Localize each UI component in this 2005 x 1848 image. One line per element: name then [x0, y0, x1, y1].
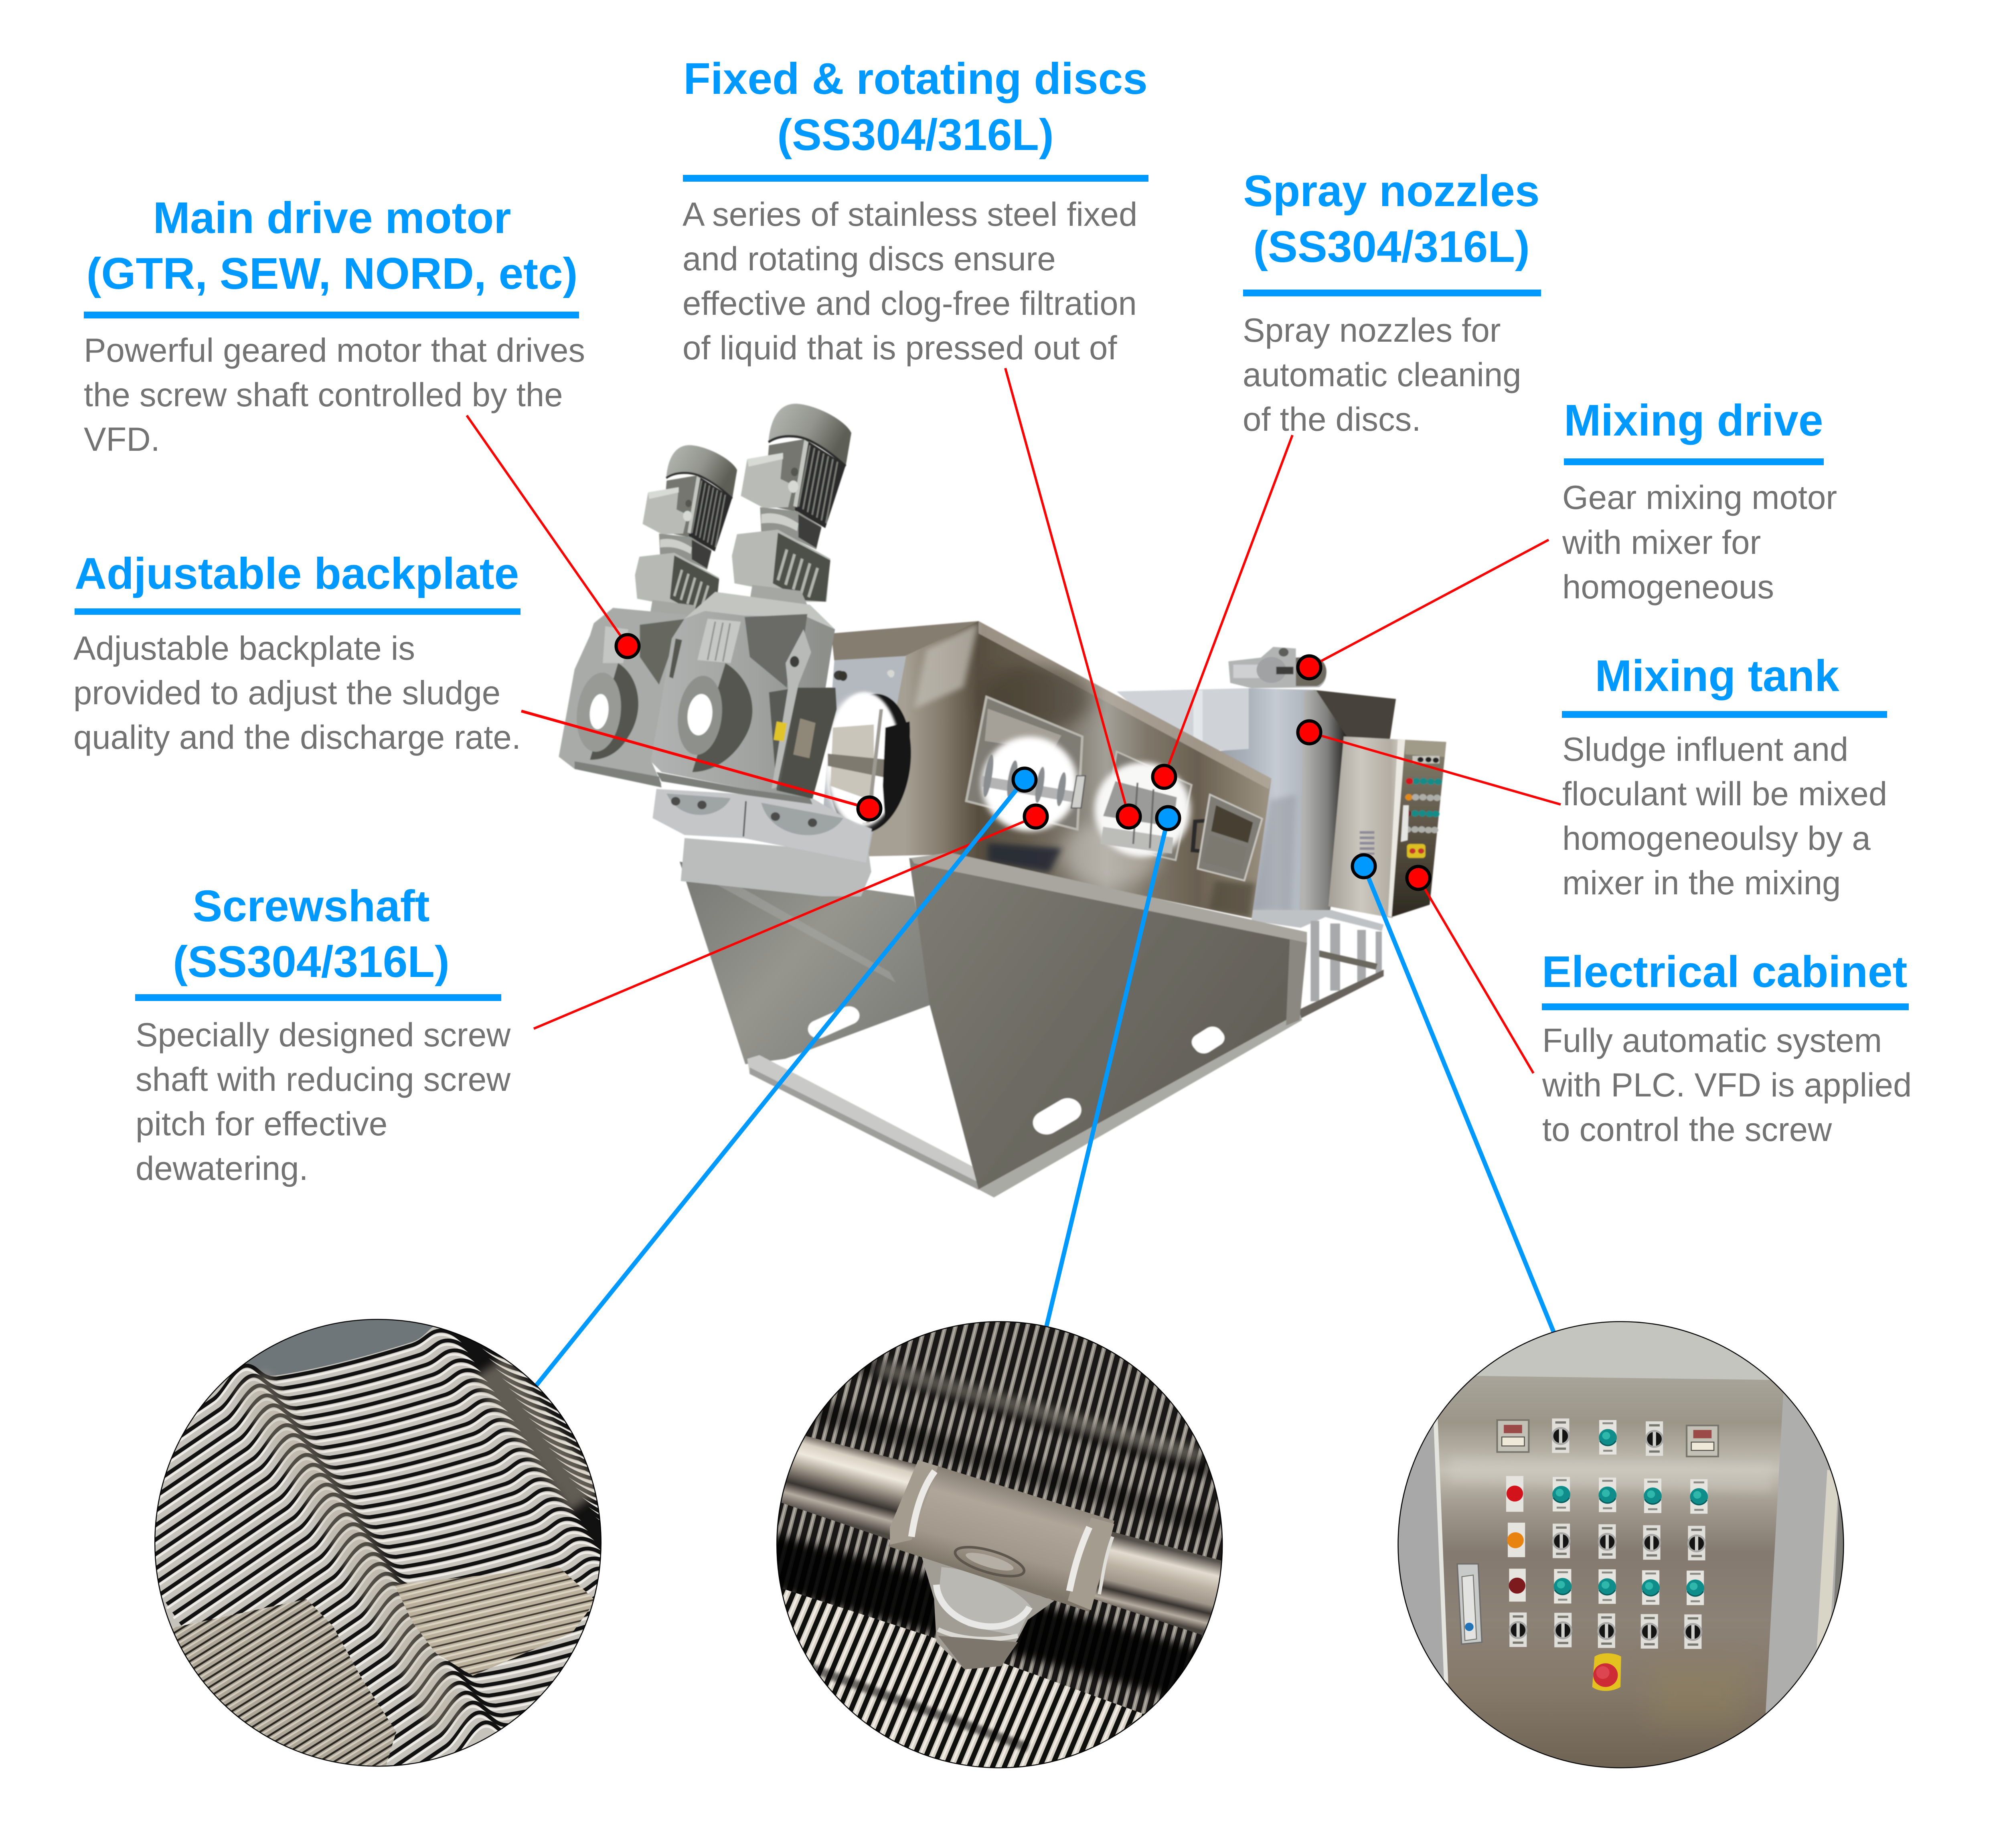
description: [136, 1016, 511, 1187]
heading: Adjustable backplate: [75, 549, 519, 598]
heading: [87, 193, 577, 298]
detail circle: nozzle pipe fitting: [762, 1303, 1283, 1805]
description: VFD.: [84, 421, 160, 458]
description: and rotating discs ensure: [683, 240, 1056, 278]
section: main drive motor: [84, 193, 585, 458]
callout line: screwshaft: [534, 817, 1036, 1029]
underline: [1564, 458, 1824, 465]
callout line: main drive motor: [467, 415, 626, 644]
row 3 switches: [1507, 1523, 1525, 1557]
heading: (GTR, SEW, NORD, etc): [87, 249, 577, 298]
callout line: adjustable backplate: [521, 711, 869, 808]
callout line: fixed and rotating discs: [1005, 368, 1129, 817]
dot: mixing drive: [1298, 656, 1321, 679]
lower fine discs right: [395, 1567, 595, 1676]
heading: [683, 54, 1148, 160]
inspection window: screw: [966, 697, 1086, 831]
light coil lower: [780, 1588, 1144, 1777]
description: [73, 630, 521, 756]
description: [683, 196, 1137, 367]
description: Gear mixing motor: [1562, 479, 1837, 516]
emergency stop: [1592, 1653, 1621, 1691]
description: homogeneoulsy by a: [1562, 820, 1871, 857]
callout line: mixing tank: [1309, 732, 1561, 804]
tee body: [888, 1460, 1114, 1612]
circle outline: [1398, 1321, 1843, 1768]
dot: mixing tank: [1298, 721, 1321, 744]
description: Spray nozzles for: [1243, 312, 1501, 349]
stainless panel: [1432, 1375, 1784, 1770]
heading: Screwshaft: [192, 881, 430, 931]
front support plate: [909, 853, 1307, 1198]
description: mixer in the mixing: [1562, 864, 1841, 902]
upper stainless body: [831, 621, 1271, 918]
heading: Electrical cabinet: [1542, 947, 1907, 997]
description: pitch for effective: [136, 1105, 387, 1143]
heading: (SS304/316L): [1253, 222, 1530, 272]
inspection window: discs: [1095, 752, 1210, 860]
drive end plate and backplate: [821, 656, 919, 856]
description: Specially designed screw: [136, 1016, 511, 1054]
underline: [1562, 711, 1887, 718]
description: of liquid that is pressed out of: [683, 329, 1117, 367]
heading: Fixed & rotating discs: [683, 54, 1148, 103]
dot: discs: [1117, 805, 1140, 828]
dot: backplate: [858, 797, 881, 820]
callout line: spray nozzles: [1164, 435, 1292, 777]
mixing drive motor: [1228, 647, 1327, 688]
detail line: nozzle detail: [1046, 818, 1168, 1327]
description: the screw shaft controlled by the: [84, 376, 563, 413]
section: spray nozzles: [1243, 166, 1541, 438]
description: quality and the discharge rate.: [73, 719, 521, 756]
description: Adjustable backplate is: [73, 630, 415, 667]
description: Powerful geared motor that drives: [84, 332, 585, 369]
detail line: spiral detail: [536, 780, 1025, 1386]
description: A series of stainless steel fixed: [683, 196, 1137, 233]
grey top surface: [240, 1313, 441, 1376]
dot: cabinet detail: [1352, 855, 1375, 877]
section: adjustable backplate: [73, 549, 521, 756]
row 5 switches: [1509, 1613, 1527, 1647]
far hopper plate and base bar: [680, 862, 980, 1190]
description: [1243, 312, 1521, 438]
heading: [173, 881, 450, 987]
mixing tank and support frame: [1117, 688, 1396, 1019]
description: with mixer for: [1562, 524, 1761, 561]
dot: nozzle detail: [1156, 807, 1180, 829]
description: [1542, 1022, 1912, 1148]
heading: (SS304/316L): [777, 110, 1054, 160]
row 2 lamps: [1506, 1476, 1523, 1512]
section: mixing tank: [1562, 651, 1887, 902]
detail line: cabinet detail: [1364, 866, 1556, 1337]
description: with PLC. VFD is applied: [1542, 1066, 1912, 1104]
electrical cabinet: [1329, 737, 1446, 918]
dot: spray nozzles: [1152, 765, 1176, 788]
machine photo: dewatering press: [559, 404, 1446, 1198]
description: shaft with reducing screw: [136, 1061, 511, 1098]
underline: [135, 994, 501, 1001]
description: of the discs.: [1243, 401, 1421, 438]
heading: Mixing tank: [1595, 651, 1839, 701]
backplate shaft and bright opening: [828, 670, 910, 824]
description: automatic cleaning: [1243, 356, 1521, 393]
description: to control the screw: [1542, 1111, 1832, 1148]
motor support frame: [652, 789, 872, 896]
callout dots: [616, 634, 1430, 890]
description: [84, 332, 585, 458]
heading: (SS304/316L): [173, 937, 450, 987]
underline: [1542, 1003, 1909, 1010]
top row controls: [1551, 1418, 1570, 1453]
ridge shading: [250, 1380, 450, 1725]
description: floculant will be mixed: [1562, 775, 1887, 813]
heading: [1244, 166, 1539, 272]
dot: main drive motor: [616, 634, 639, 658]
description: effective and clog-free filtration: [683, 285, 1137, 322]
description: homogeneous: [1562, 568, 1774, 606]
lower fine discs left: [150, 1599, 396, 1777]
section: mixing drive: [1562, 396, 1837, 606]
geared motor: rear: [559, 445, 737, 787]
heading: Mixing drive: [1564, 396, 1823, 445]
dot: spiral detail: [1013, 768, 1036, 791]
section: screwshaft: [135, 881, 511, 1187]
description: [1562, 479, 1837, 606]
underline: [683, 175, 1148, 182]
section: electrical cabinet: [1542, 947, 1912, 1148]
detail circle: spiral discs: [47, 1271, 858, 1846]
row 4 lamps: [1509, 1569, 1526, 1602]
underline: [84, 312, 579, 318]
description: dewatering.: [136, 1150, 308, 1187]
right pipe: [1084, 1529, 1234, 1639]
geared motor: front: [651, 404, 851, 804]
left pipe: [769, 1428, 918, 1542]
description: Fully automatic system: [1542, 1022, 1882, 1059]
detail circle: control panel: [1383, 1303, 1905, 1805]
inspection window: right: [1198, 794, 1262, 881]
tee stem: [921, 1556, 1055, 1670]
description: provided to adjust the sludge: [73, 674, 500, 711]
door handle: [1457, 1564, 1482, 1644]
heading: Main drive motor: [153, 193, 511, 243]
description: [1562, 731, 1887, 902]
callout line: electrical cabinet: [1418, 878, 1533, 1073]
heading: Spray nozzles: [1244, 166, 1539, 216]
section: fixed and rotating discs: [683, 54, 1148, 367]
callout line: mixing drive: [1309, 540, 1549, 667]
circle outline: [777, 1321, 1222, 1768]
underline: [1243, 290, 1541, 296]
dot: electrical cabinet: [1407, 866, 1430, 890]
timers: [1497, 1420, 1529, 1452]
description: Sludge influent and: [1562, 731, 1848, 768]
underline: [75, 608, 520, 615]
dot: screwshaft: [1024, 805, 1047, 828]
circle outline: [155, 1319, 601, 1766]
